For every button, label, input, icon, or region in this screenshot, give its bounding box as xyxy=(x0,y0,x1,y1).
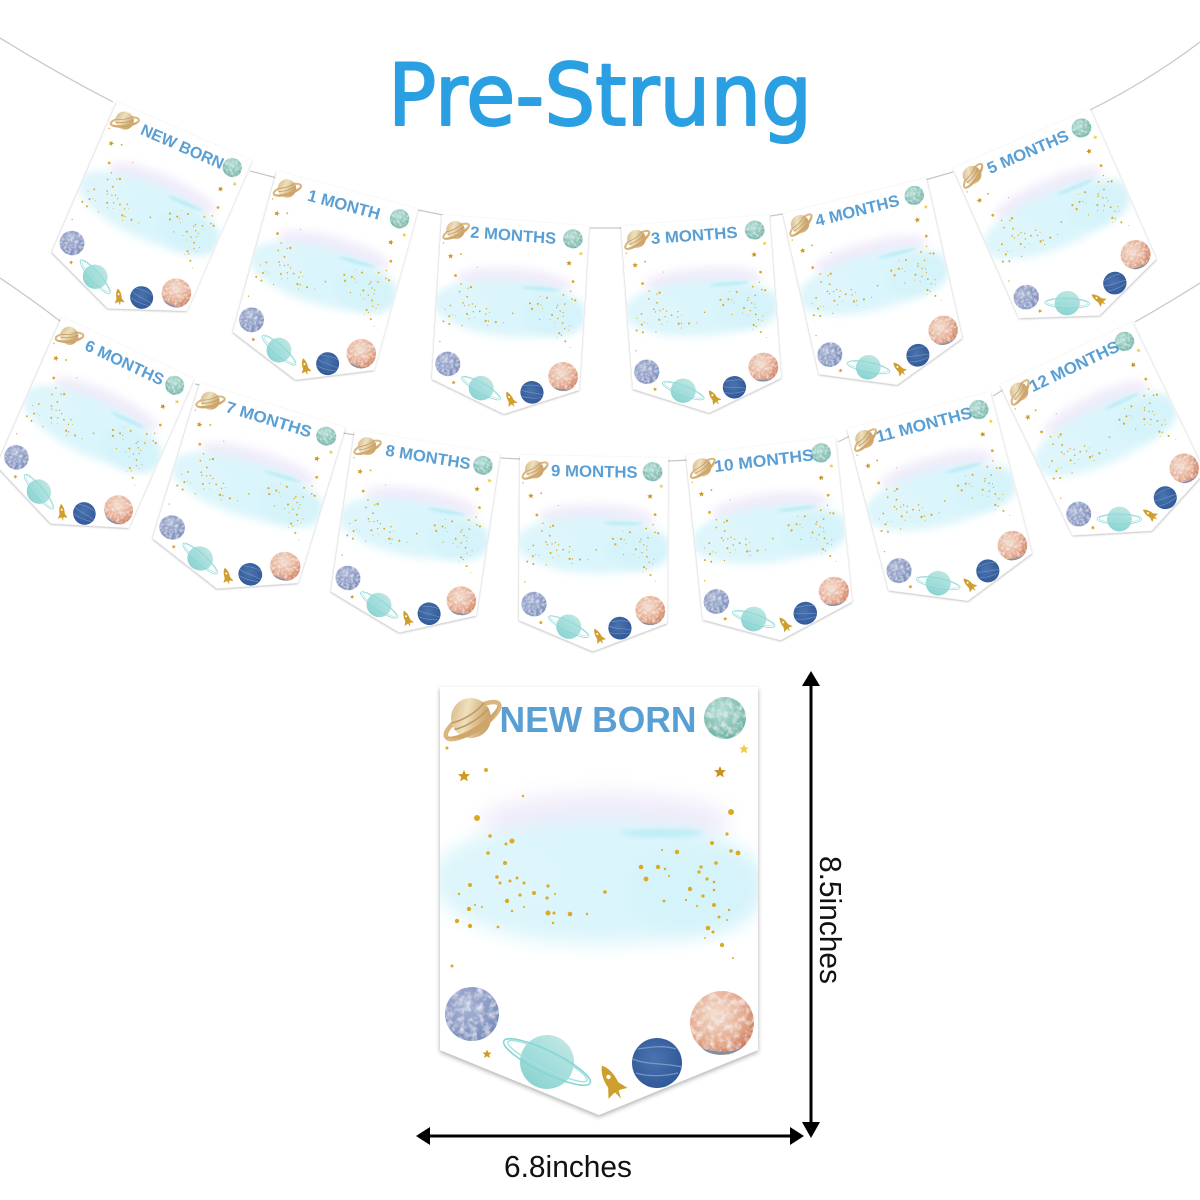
banner card: 6 months xyxy=(0,315,197,556)
banner card: 12 months xyxy=(997,320,1200,563)
banner card: 5 months xyxy=(950,107,1171,346)
title: Pre-Strung xyxy=(388,46,812,146)
label: width: 6.8inches xyxy=(504,1149,632,1184)
banner card: 2 months: 2 MONTHS xyxy=(470,224,557,248)
banner card: 10 months xyxy=(683,436,858,649)
banner card: 4 months xyxy=(780,176,972,403)
arrow: width dimension xyxy=(416,1127,804,1145)
banner card: 10 months: 10 MONTHS xyxy=(713,446,815,476)
banner card: 2 months xyxy=(428,214,592,420)
banner card: 12 months: 12 MONTHS xyxy=(1026,337,1122,396)
banner card: 8 months xyxy=(324,428,503,645)
arrow: height dimension xyxy=(802,671,820,1138)
banner card: 7 months xyxy=(142,381,349,612)
banner card: 3 months: 3 MONTHS xyxy=(650,224,738,248)
banner card: 1 month: 1 MONTH xyxy=(306,186,382,224)
banner card: new born (small): NEW BORN xyxy=(138,121,226,173)
banner card: 6 months: 6 MONTHS xyxy=(82,337,167,389)
string: bottom row xyxy=(0,278,1200,461)
banner card: 8 months: 8 MONTHS xyxy=(384,442,472,473)
banner card: 4 months: 4 MONTHS xyxy=(814,192,901,230)
banner card: new born (small) xyxy=(38,100,255,339)
banner card: 3 months xyxy=(618,214,786,418)
banner card: 9 months: 9 MONTHS xyxy=(551,461,638,482)
large sample card: new born xyxy=(434,685,765,1115)
banner card: 9 months xyxy=(516,454,671,653)
banner card: 7 months: 7 MONTHS xyxy=(224,398,314,441)
label: height: 8.5inches xyxy=(813,856,848,984)
banner card: 1 month xyxy=(223,169,421,400)
large sample card: new born: NEW BORN xyxy=(500,699,696,740)
banner card: 11 months xyxy=(844,390,1042,620)
string: top row xyxy=(0,38,1200,228)
banner card: 5 months: 5 MONTHS xyxy=(984,126,1072,178)
banner card: 11 months: 11 MONTHS xyxy=(874,403,974,446)
